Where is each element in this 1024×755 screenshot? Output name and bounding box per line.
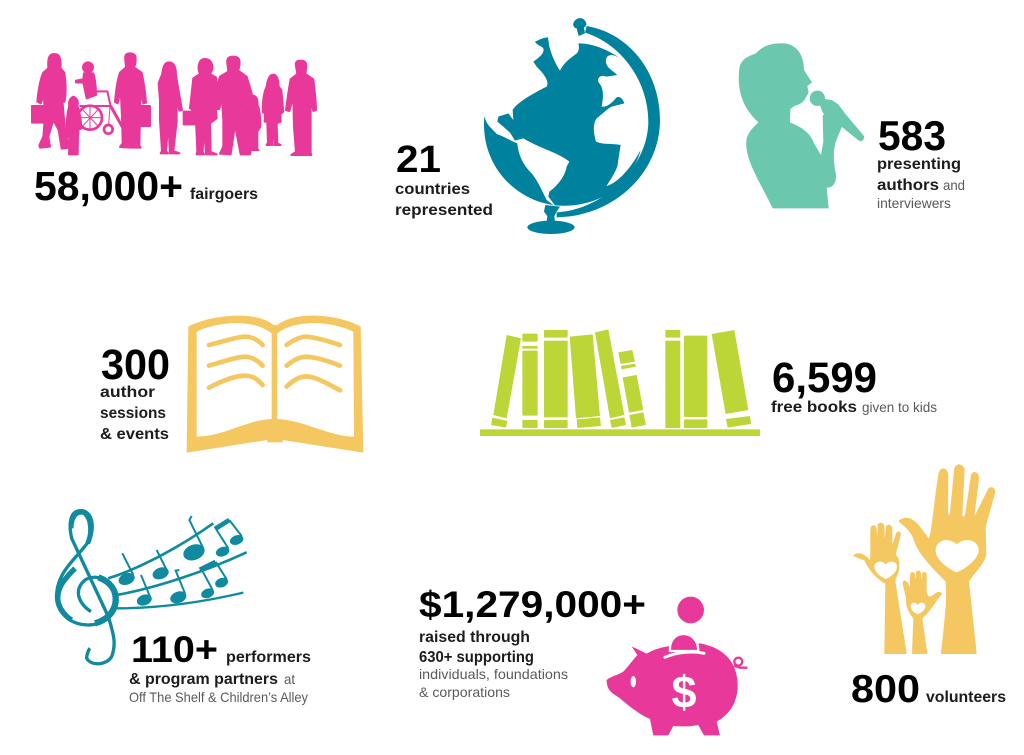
label: author sessions and events: sessions — [100, 405, 166, 422]
label: free books given to kids — [771, 399, 937, 416]
number: 800: 800 — [851, 668, 920, 711]
label: raised through supporters: 630+ supporting — [419, 649, 534, 666]
panel: presenting authors — [739, 43, 965, 211]
label: raised through supporters: & corporations — [419, 684, 510, 700]
label: volunteers: volunteers — [926, 689, 1006, 706]
label: countries represented: represented — [395, 202, 493, 219]
panel: countries represented — [395, 18, 660, 234]
icon: singer with microphone — [739, 43, 864, 208]
number: 21: 21 — [396, 139, 441, 181]
icon: open book — [187, 316, 363, 453]
panel: fairgoers — [32, 53, 316, 209]
label: performers and program partners — [129, 649, 311, 705]
panel: performers — [57, 511, 311, 705]
icon: raised hands with hearts — [854, 465, 995, 653]
panel: volunteers — [851, 465, 1006, 711]
label: performers and program partners: Off The Shelf & Children’s Alley — [129, 689, 308, 705]
label: presenting authors and interviewers: authors — [877, 177, 939, 194]
label: author sessions and events — [100, 384, 169, 443]
panel: funds raised — [419, 584, 747, 735]
label: raised through supporters: individuals, foundations — [419, 666, 568, 682]
icon: piggy bank and coin: $ — [671, 667, 696, 718]
label: presenting authors and interviewers: interviewers — [877, 195, 951, 211]
panel: free books — [480, 329, 937, 436]
icon: crowd of people — [32, 53, 316, 155]
label: presenting authors and interviewers — [877, 156, 965, 211]
icon: treble clef and music notes — [57, 511, 247, 664]
icon: piggy bank and coin — [607, 597, 747, 735]
label: countries represented — [395, 181, 493, 219]
number: 110+: 110+ — [131, 629, 218, 670]
number: 58,000+: 58,000+ — [34, 163, 183, 209]
label: countries represented: countries — [395, 181, 470, 198]
number: 6,599: 6,599 — [772, 354, 877, 402]
label: fairgoers: fairgoers — [190, 186, 258, 203]
label: performers and program partners: at — [284, 671, 295, 687]
label: presenting authors and interviewers: and — [943, 177, 965, 193]
label: author sessions and events: & events — [100, 426, 169, 443]
number: 583: 583 — [878, 112, 946, 159]
panel: author sessions — [100, 316, 363, 453]
icon: books on a shelf — [480, 329, 760, 436]
label: raised through supporters — [419, 629, 568, 700]
label: free books given to kids: given to kids — [862, 399, 937, 415]
label: raised through supporters: raised through — [419, 629, 530, 646]
number: 300: 300 — [101, 341, 170, 389]
label: free books given to kids: free books — [771, 399, 857, 416]
label: presenting authors and interviewers: presenting — [877, 156, 961, 173]
label: performers and program partners: & program partners — [129, 671, 278, 688]
number: $1,279,000+: $1,279,000+ — [419, 584, 646, 625]
label: performers and program partners: performers — [226, 649, 311, 666]
label: author sessions and events: author — [100, 384, 155, 401]
icon: globe — [484, 18, 660, 234]
